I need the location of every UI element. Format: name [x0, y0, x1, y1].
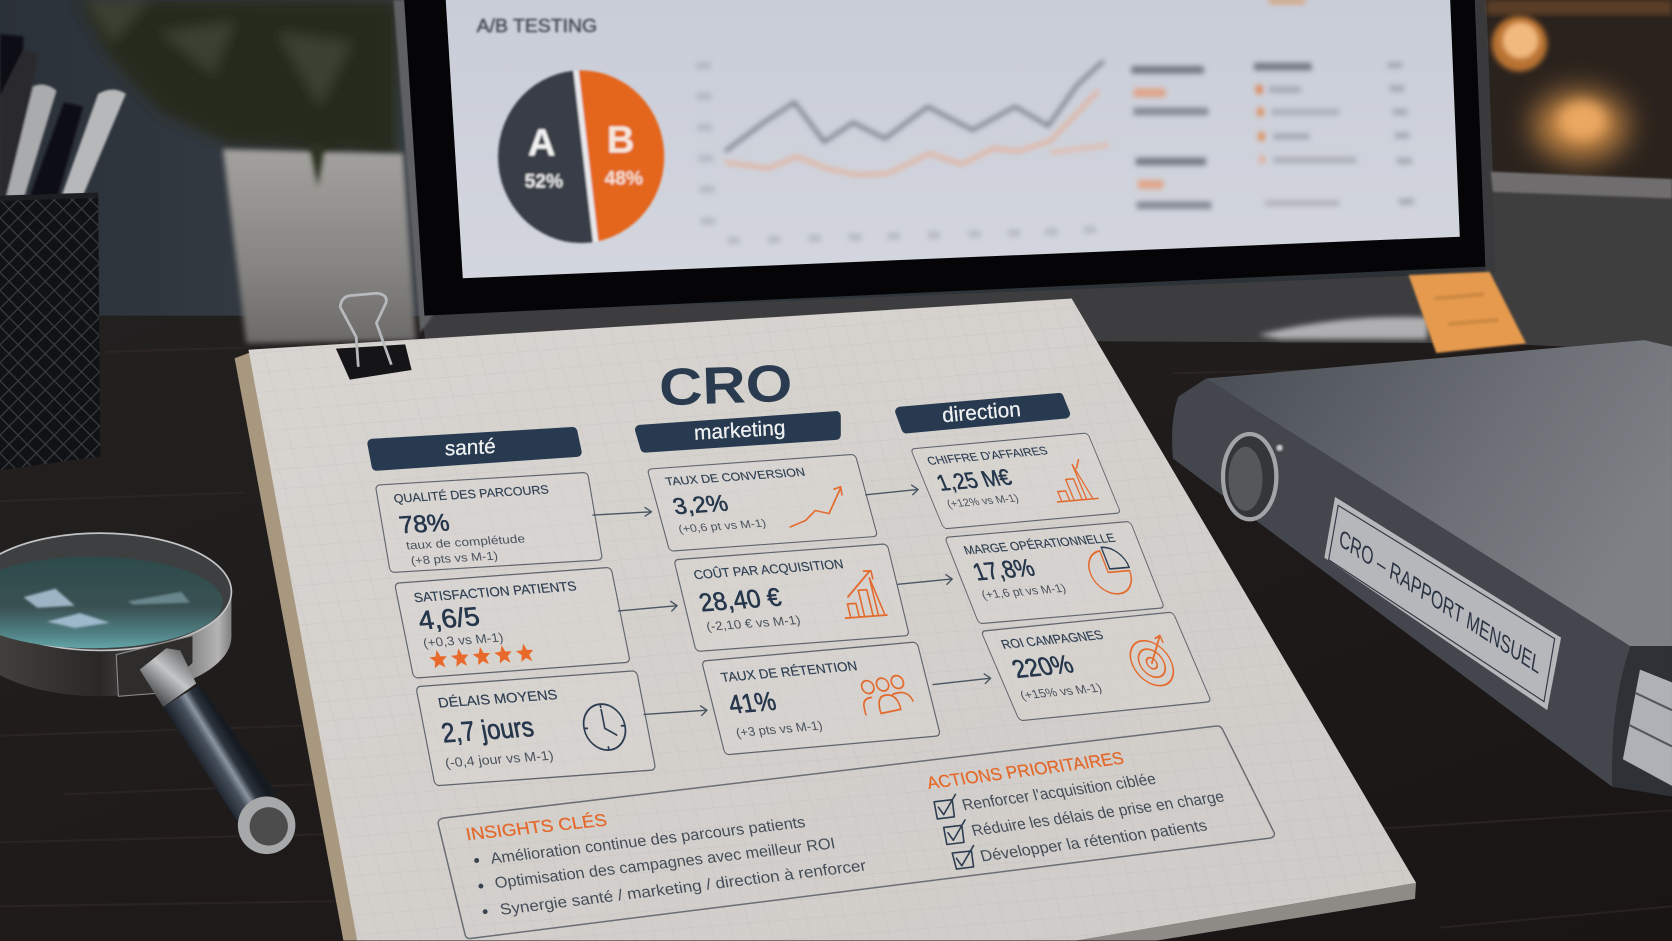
- card: qualité des parcours: (+8 pts vs M-1): [410, 550, 499, 568]
- arrow: qualité to conversion: [593, 508, 652, 516]
- card: chiffre d'affaires: (+12% vs M-1): [945, 493, 1021, 511]
- card: coût par acquisition: 28,40 €: [696, 584, 784, 618]
- card: ROI campagnes: 220%: [1008, 651, 1078, 684]
- card: taux de rétention: TAUX DE RÉTENTION: [719, 658, 859, 685]
- actions checklist: Développer la rétention patients: [978, 817, 1209, 865]
- card: délais moyens: [416, 671, 656, 786]
- insights list: Synergie santé / marketing / direction à renforcer: [499, 857, 868, 919]
- panel: insights and actions: [438, 726, 1274, 939]
- card: chiffre d'affaires: 1,25 M€: [932, 464, 1015, 496]
- card: satisfaction patients: 4,6/5: [416, 602, 482, 636]
- handle: [140, 648, 295, 854]
- arrow: conversion to chiffre: [866, 485, 918, 495]
- card: taux de conversion: [647, 454, 878, 551]
- card: qualité des parcours: 78%: [397, 509, 452, 539]
- insights list: Amélioration continue des parcours patients: [489, 814, 807, 868]
- card: taux de conversion: 3,2%: [670, 490, 731, 519]
- chart legend: [1131, 0, 1414, 209]
- card: taux de rétention: [702, 642, 940, 755]
- card: taux de rétention: 41%: [726, 687, 779, 720]
- heading: actions prioritaires: ACTIONS PRIORITAIRES: [924, 748, 1126, 793]
- heading: insights clés: INSIGHTS CLÉS: [464, 810, 609, 844]
- insights list: [474, 814, 868, 919]
- icon: rising line: [780, 487, 851, 527]
- wooden desk: [0, 316, 1672, 941]
- card: satisfaction patients: SATISFACTION PATIENTS: [413, 579, 578, 605]
- card: marge opérationnelle: MARGE OPÉRATIONNELLE: [962, 531, 1118, 558]
- background wall: [0, 0, 1672, 341]
- card: satisfaction patients: (+0,3 vs M-1): [422, 630, 505, 650]
- sticky note: [1409, 272, 1526, 353]
- card: qualité des parcours: taux de complétude: [405, 533, 526, 553]
- title: CRO: [658, 355, 793, 417]
- binder label: CRO – RAPPORT MENSUEL: [1337, 525, 1542, 680]
- magnifying glass: [0, 533, 295, 854]
- actions checklist: Renforcer l'acquisition ciblée: [960, 771, 1158, 814]
- A/B pie chart: [496, 68, 666, 245]
- card: coût par acquisition: COÛT PAR ACQUISITION: [692, 556, 845, 582]
- icon: people group: [857, 675, 915, 715]
- heading: marketing: marketing: [694, 416, 786, 445]
- card: délais moyens: (-0,4 jour vs M-1): [444, 748, 555, 771]
- card: ROI campagnes: (+15% vs M-1): [1018, 682, 1104, 703]
- card: coût par acquisition: [674, 544, 909, 652]
- actions checklist: [934, 771, 1227, 869]
- cardboard backing: [235, 352, 363, 940]
- arrow: délais to rétention: [644, 706, 707, 715]
- card: ROI campagnes: ROI CAMPAGNES: [999, 628, 1106, 652]
- icon: bar chart rising: [835, 570, 887, 618]
- arrow: satisfaction to coût: [618, 601, 677, 611]
- A/B testing heading: A/B TESTING: [477, 16, 597, 36]
- binder clip: [336, 293, 412, 380]
- heading: santé: [372, 432, 577, 466]
- A/B pie chart: 48%: [605, 168, 643, 189]
- card: chiffre d'affaires: [911, 433, 1121, 529]
- heading: marketing: [640, 416, 836, 448]
- warm background with lights: [1486, 0, 1672, 352]
- icon: five stars: [428, 643, 535, 669]
- card: coût par acquisition: (-2,10 € vs M-1): [705, 613, 802, 634]
- card: marge opérationnelle: 17,8%: [969, 554, 1038, 586]
- binder ring: [1223, 434, 1283, 519]
- binder label: [1324, 497, 1561, 710]
- card: ROI campagnes: [981, 612, 1211, 721]
- report sheet: [235, 293, 1416, 940]
- card: qualité des parcours: [375, 472, 602, 573]
- card: marge opérationnelle: (+1,6 pt vs M-1): [980, 582, 1068, 602]
- binder: [1172, 340, 1672, 797]
- arrow: rétention to ROI: [933, 674, 991, 685]
- pen holder: [0, 34, 126, 470]
- lens ring: [0, 533, 231, 696]
- insights list: Optimisation des campagnes avec meilleur ROI: [493, 835, 837, 892]
- monitor: [393, 0, 1497, 347]
- card: taux de conversion: TAUX DE CONVERSION: [664, 467, 807, 488]
- arrows between columns: [593, 485, 991, 715]
- card: délais moyens: DÉLAIS MOYENS: [437, 686, 559, 711]
- icon: target: [1122, 636, 1181, 688]
- line chart: [696, 61, 1109, 244]
- A/B pie chart: A: [528, 122, 556, 165]
- plant and pot: [77, 0, 416, 343]
- arrow: coût to marge: [898, 575, 952, 584]
- lens glass: [0, 557, 223, 648]
- card: chiffre d'affaires: CHIFFRE D'AFFAIRES: [925, 445, 1050, 468]
- card: marge opérationnelle: [945, 521, 1164, 624]
- icon: pie chart: [1081, 546, 1139, 595]
- A/B pie chart: 52%: [525, 172, 563, 193]
- heading: santé: santé: [445, 435, 496, 461]
- icon: bars: [1041, 459, 1098, 502]
- card: satisfaction patients: [395, 567, 630, 678]
- card: taux de conversion: (+0,6 pt vs M-1): [677, 518, 768, 536]
- heading: direction: direction: [941, 398, 1022, 427]
- actions checklist: Réduire les délais de prise en charge: [970, 789, 1227, 840]
- card: taux de rétention: (+3 pts vs M-1): [734, 718, 824, 740]
- card: qualité des parcours: QUALITÉ DES PARCOURS: [392, 481, 550, 506]
- heading: direction: [900, 398, 1065, 429]
- card: délais moyens: 2,7 jours: [439, 711, 536, 749]
- monitor screen: [446, 0, 1460, 278]
- A/B pie chart: B: [607, 118, 634, 161]
- icon: clock: [580, 703, 629, 751]
